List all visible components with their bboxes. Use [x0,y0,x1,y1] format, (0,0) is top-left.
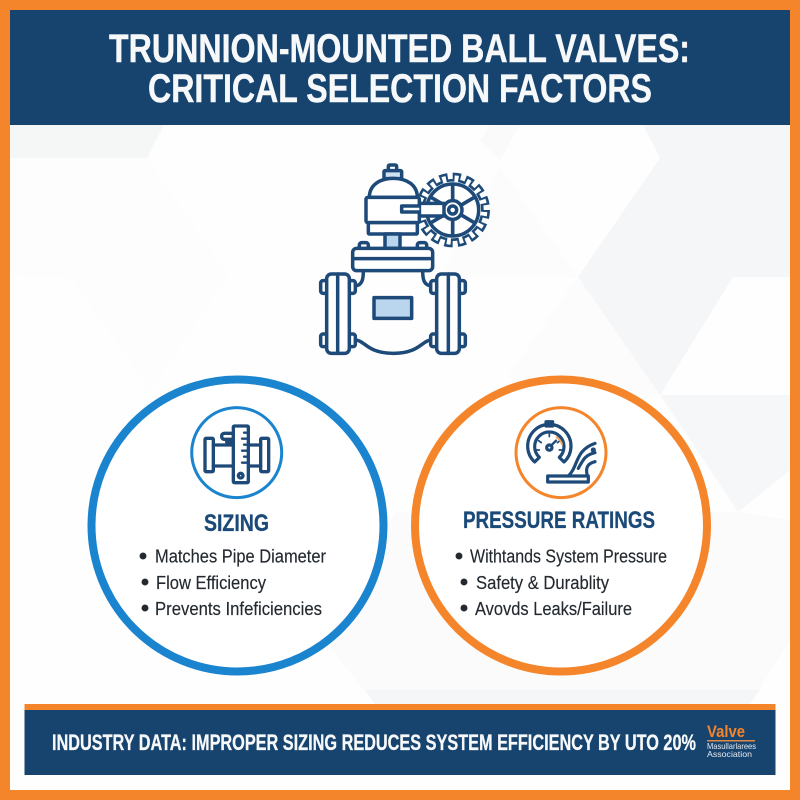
blue ring [92,380,384,672]
icon: pressure gauge and flow [516,408,606,498]
pressure ratings bullet list: Avovds Leaks/Failure [475,599,632,619]
sizing heading: SIZING [204,510,269,537]
orange ring [415,380,707,672]
panel: sizing [92,380,384,672]
valve window [374,298,412,318]
panel: pressure ratings [415,380,707,672]
pressure ratings bullet list [456,546,667,619]
icon: pipe and ruler [192,408,282,498]
pressure ratings bullet list: Withtands System Pressure [470,546,667,566]
actuator dome [369,178,417,197]
pressure ratings bullet list: Safety & Durablity [476,573,609,593]
logo: valve association: Valve [707,722,745,741]
logo: valve association: Association [707,749,752,759]
logo: valve association [707,722,756,759]
pressure ratings heading: PRESSURE RATINGS [463,507,655,534]
valve stem [385,234,400,248]
sizing bullet list: Matches Pipe Diameter [155,546,326,566]
actuator body [366,197,419,223]
actuator cap [388,165,397,171]
sizing bullet list: Prevents Infeficiencies [155,599,322,619]
icon: trunnion ball valve with gear [321,165,486,353]
right end flange [431,274,465,353]
footer data banner [24,704,776,775]
title banner [10,10,790,125]
logo: valve association: Masullarlarees [707,741,756,751]
bonnet bolts and flange [353,243,433,271]
actuator arm [419,203,444,216]
left end flange [321,274,355,353]
title line 2: CRITICAL SELECTION FACTORS [148,67,652,111]
sizing bullet list [140,546,326,619]
icon: gear wheel [419,177,486,243]
valve body [355,271,432,353]
sizing bullet list: Flow Efficiency [156,573,266,593]
